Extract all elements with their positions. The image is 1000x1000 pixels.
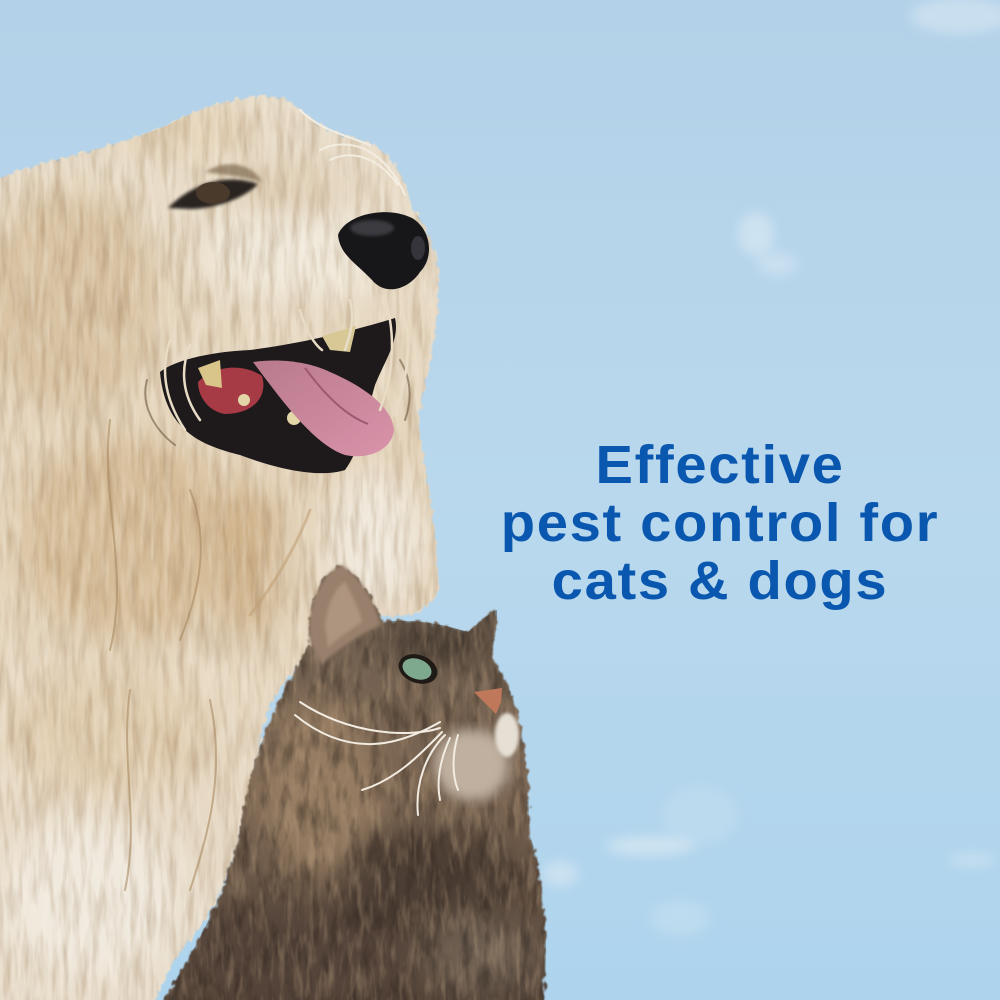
dog mouth <box>160 318 396 473</box>
dog tongue <box>253 360 394 456</box>
tongue crease <box>305 368 368 424</box>
cat eye <box>394 649 442 689</box>
cat ear <box>309 565 380 665</box>
fur streak texture dark <box>0 90 445 1000</box>
headline: pest control for <box>501 493 939 553</box>
cat nose <box>474 688 502 714</box>
clouds <box>542 0 1000 936</box>
cat chin <box>495 713 519 757</box>
cat dark tabby texture <box>150 560 550 1000</box>
dog <box>0 90 445 1000</box>
cat body silhouette <box>150 565 546 1000</box>
cat <box>150 560 550 1000</box>
dog fur shading and texture <box>0 90 445 1000</box>
cat light tabby texture <box>164 590 546 1000</box>
dog gums and teeth <box>198 326 356 425</box>
dog eye <box>168 179 258 209</box>
dog brow shadow <box>205 164 262 182</box>
dog body and head silhouette <box>0 97 439 1000</box>
cat muzzle and chest <box>434 729 510 801</box>
headline <box>501 435 939 611</box>
dog fur strands <box>108 360 410 890</box>
dog head wisps <box>300 110 405 195</box>
fur over mouth <box>165 300 408 430</box>
headline: Effective <box>595 435 845 495</box>
cat fur shading and texture <box>150 560 550 1000</box>
fur streak texture light <box>0 90 445 1000</box>
headline: cats & dogs <box>552 551 888 611</box>
cat whiskers <box>295 702 458 815</box>
dog nose <box>338 212 429 289</box>
